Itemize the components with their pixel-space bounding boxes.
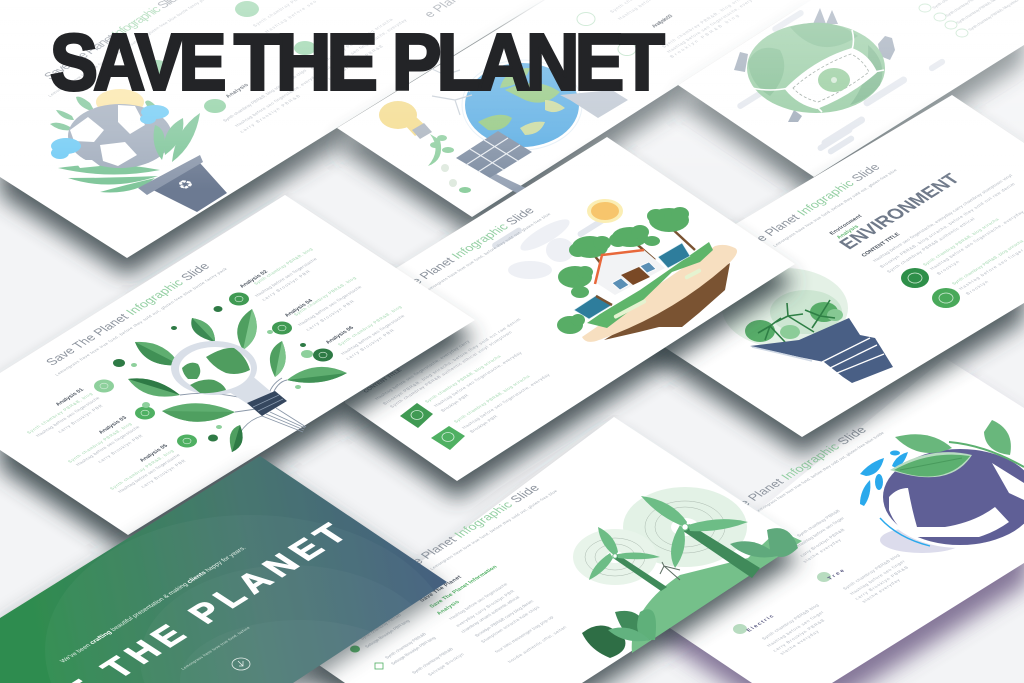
text: cover subtitle: Lemongrass have love true fund, before — [180, 626, 251, 671]
text: water block: carry Brooklyn PBR&B — [799, 528, 846, 558]
title — [50, 18, 665, 106]
text: paragraph — [448, 582, 568, 664]
text: slide title: e Planet Infographic Slide — [408, 205, 537, 287]
text: analysis 01: Synth chambray PBR&B, blog — [26, 392, 94, 435]
text: analysis 04: Analysis 04 — [284, 298, 315, 318]
text: list items: Synth chambray PBR&B — [411, 647, 454, 675]
text: electric block: Electric — [746, 614, 776, 633]
icon: trees — [557, 207, 695, 334]
icon: blue clouds — [51, 105, 169, 159]
icon: pale sun — [96, 89, 144, 115]
text: section heading: Save The Planet Information — [429, 564, 500, 609]
panel: masked planet slide — [678, 0, 1024, 177]
text: analysis 05 — [109, 444, 187, 494]
icon: green marker badge — [400, 403, 433, 428]
text: analysis 03 — [67, 416, 144, 467]
text: paragraph: Brooklyn PBR&B, blog sriracha, before they sold out raw denim — [382, 317, 522, 406]
text: second note: Brooklyn — [965, 280, 990, 296]
text: paragraph: chambray umami authentic ethical — [460, 595, 521, 634]
icon: tiny turbine — [660, 562, 680, 580]
icon: pollution clouds — [736, 9, 946, 155]
text: electric block: Synth chambray PBR&B blog — [761, 603, 820, 641]
text: analysis notes: Analysis 03 — [651, 14, 675, 29]
icon: bulb leaves — [128, 309, 347, 452]
text: analysis 06: Synth chambray PBR&B, blog — [337, 305, 403, 347]
text: list items: Selvage Brooklyn PBR blog — [390, 636, 437, 666]
text: environment heading: ENVIRONMENT — [835, 170, 965, 253]
icon: tall leaves — [154, 113, 200, 162]
text: analysis 04: Hashtag before seo fingerstache — [297, 285, 363, 327]
text: analysis 06: Analysis 06 — [325, 326, 355, 345]
text: analysis 01: Hashtag before seo fingerstache — [35, 396, 101, 438]
text: first note: Synth chambray PBR&B, blog sriracha — [424, 354, 502, 404]
icon: earth shadow — [880, 527, 964, 553]
text: environment label: Environment — [829, 214, 864, 236]
text: slide subtitle: Lemongrass have love true fund, before they sold out, gluten-free blue bottle — [754, 431, 886, 514]
text: analysis 03: carry Brooklyn PBR — [97, 433, 144, 464]
text: analysis 01: Analysis 01 — [55, 388, 85, 407]
text: analysis notes: Hashtag before seo fingerstache, everyday — [317, 18, 408, 76]
text: tagline: We've been crafting beautiful presentation & making clients happy for years. — [59, 545, 248, 664]
icon: recycling bin — [138, 155, 227, 212]
text: paragraph: Stumptown sriracha kale chips — [480, 605, 541, 644]
text: analysis 03: Analysis 03 — [98, 416, 128, 435]
panel: globe and energy slide — [337, 0, 811, 217]
title: PLANET — [392, 18, 665, 106]
icon: sound rings — [573, 487, 747, 585]
panel: earth and leaves slide — [640, 358, 1024, 683]
panel: floating island slide — [345, 137, 795, 481]
text: second note: Brooklyn PBR — [469, 414, 499, 434]
text: paragraph: everyday carry Brooklyn PBR — [455, 589, 516, 628]
icon: purple earth — [880, 446, 1024, 548]
text: section sub heading: Analysis — [436, 600, 461, 616]
text: analysis notes — [222, 0, 408, 134]
icon: solar panel — [456, 131, 532, 196]
icon: grey dish — [560, 90, 628, 118]
panel: green cover slide — [0, 456, 455, 683]
text: analysis 04: Synth chambray PBR&B, blog — [293, 276, 357, 317]
text: slide subtitle: Lemongrass have love true fund, before they sold out, gluten-free blue — [772, 168, 899, 248]
icon: down arrow button — [232, 658, 250, 670]
text: paragraph: Brooklyn PBR&B, blog sriracha, before they sold out raw denim — [879, 182, 1016, 269]
text: content title: CONTENT TITLE — [861, 232, 902, 258]
icon: face mask — [752, 30, 884, 112]
text: second note: Hashtag before seo fingerstache, everyday — [461, 372, 551, 430]
text: first note: Brooklyn PBR — [440, 393, 470, 413]
panel: environment bulb slide — [600, 95, 1024, 437]
text: paragraph: hoodie authentic offal, seitan — [507, 625, 568, 664]
text: slide subtitle: Lemongrass have love true fund, before they sold out, gluten-free blue — [424, 212, 552, 293]
panel: wind turbine slide — [300, 417, 802, 683]
text: analysis 02: Analysis 02 — [239, 270, 269, 289]
icon: dark green marker — [901, 268, 929, 288]
icon: foreground bushes — [582, 609, 656, 658]
icon: faint wind turbines — [430, 68, 472, 115]
text: analysis 05: Analysis 05 — [139, 444, 169, 463]
text: list items: Synth chambray PBR&B — [359, 613, 402, 641]
text: water block: stache everyday — [802, 538, 843, 564]
text: paragraph: Synth chambray PBR&B authentic ethical — [886, 217, 976, 274]
text: analysis 03: Hashtag before seo fingerstache — [75, 425, 141, 467]
text: analysis notes: Analysis — [225, 83, 250, 99]
text: paragraph: Synth chambray PBR&B authentic ethical vinyl stumptown — [389, 330, 514, 409]
text: analysis 02: Hashtag before seo fingerstache — [254, 257, 318, 298]
icon: floating island — [582, 242, 737, 342]
text: analysis notes: Brooklyn PBR&B blog — [669, 13, 740, 59]
text: analysis notes: Synth chambray PBR&B, blog sriracha kale chips — [222, 68, 308, 123]
text: second note: Synth chambray PBR&B, blog sriracha — [951, 239, 1024, 286]
icon: green planet — [747, 23, 885, 113]
icon: blue earth globe — [462, 60, 582, 150]
icon: marker circles and dots — [94, 292, 333, 448]
panel: light bulb analysis slide — [0, 195, 475, 535]
icon: plant leaves — [50, 97, 160, 192]
icon: glass bulb — [722, 268, 848, 348]
panel: recycling slide — [0, 0, 543, 258]
text: list lines — [931, 0, 1023, 32]
text: analysis notes: carry Brooklyn PBR&B — [327, 44, 384, 81]
text: electric block — [733, 603, 826, 656]
title: SAVE — [50, 18, 224, 106]
icon: recycling bin: ♻ — [172, 176, 199, 193]
text: analysis 04: carry Brooklyn PBR — [305, 299, 356, 332]
text: paragraph: Hashtag before seo fingerstache, everyday carry chambray stumptown vinyl — [872, 173, 1013, 263]
text: list items: Selvage Brooklyn — [427, 652, 466, 677]
text: paragraph: Hashtag before seo fingerstache, everyday carry — [374, 339, 471, 401]
icon: globe light bulb — [171, 341, 287, 416]
icon: green marker — [932, 288, 960, 308]
text: analysis 06: Hashtag before seo fingerstache — [340, 314, 406, 356]
text: analysis 06: carry Brooklyn PBR — [345, 328, 396, 361]
icon: leaves on hill — [730, 528, 798, 558]
icon: small turbine — [589, 527, 667, 591]
text: analysis 02 — [239, 247, 318, 302]
text: second note: Hashtag before seo finger — [958, 248, 1024, 291]
text: second note: Synth chambray PBR&B, blog sriracha — [453, 374, 531, 424]
icon: sprout — [428, 134, 471, 193]
text: list items: Selvage Brooklyn PBR blog — [364, 619, 411, 649]
text: analysis 05: Hashtag before seo fingerstache — [117, 453, 181, 494]
icon: bulb base — [750, 318, 893, 383]
text: first note: Brooklyn — [936, 260, 961, 276]
text: slide title: e Planet Infographic Slide — [753, 161, 883, 244]
text: analysis 02: Synth chambray PBR&B, blog — [253, 247, 314, 286]
text: list items: Synth chambray PBR&B — [384, 632, 427, 660]
text: analysis notes: Hashtag before seo fingerstache, everyday — [234, 73, 321, 128]
icon: sun — [587, 199, 623, 223]
text: analysis notes: carry Brooklyn PBR&B — [239, 94, 301, 134]
text: water block: Synth chambray PBR&B — [796, 509, 841, 538]
icon: pale clouds — [491, 212, 614, 279]
icon: grey recycled globe — [68, 104, 172, 168]
text: tree block: Tree — [827, 569, 846, 581]
icon: outline markers — [577, 12, 636, 56]
text: slide title: e Planet Infographic Slide — [409, 482, 543, 567]
icon: bulb wires — [180, 378, 306, 452]
text: analysis notes — [609, 0, 774, 59]
text: slide subtitle: Lemongrass have love true fund, before they sold out, gluten-free blue bottle fanny pack — [54, 266, 229, 377]
text: analysis label: Analysis — [836, 224, 860, 240]
text: analysis notes: Synth chambray PBR&B, blog sriracha — [310, 17, 394, 71]
icon: water drops — [860, 450, 908, 506]
text: paragraph: Brooklyn PBR&B carry blog denim — [474, 599, 535, 638]
text: content title: CONTENT TITLE — [363, 368, 404, 394]
text: list items — [350, 613, 466, 677]
icon: house — [595, 250, 665, 295]
text: electric block: stache everyday — [779, 629, 820, 656]
text: analysis 05: Synth chambray PBR&B, blog — [109, 449, 175, 491]
text: slide title: Save The Planet Infographic Slide — [43, 261, 213, 368]
icon: green leaves — [890, 420, 1024, 477]
text: slide subtitle: Lemongrass have love true fund, before they sold out, gluten-free blue — [429, 489, 559, 571]
icon: solar panels — [574, 243, 690, 319]
icon: hill — [632, 530, 802, 653]
text: first note: Hashtag before seo fingerstache, everyday — [433, 350, 523, 408]
text: slide title: e Planet Infographic Slide — [736, 424, 870, 509]
icon: large turbine — [641, 496, 760, 578]
text: water block — [796, 509, 846, 564]
text: section label: Save The Planet — [419, 575, 463, 603]
text: paragraph: four loko messenger bag pop-up — [494, 615, 555, 654]
text: paragraph: Hashtag before seo fingerstache — [448, 582, 509, 621]
text: electric block: Hashtag before seo finger — [766, 610, 825, 648]
text: tree block: Hashtag before seo finger — [849, 559, 907, 596]
text: analysis 03: Synth chambray PBR&B, blog — [67, 422, 133, 464]
icon: outline list markers — [919, 4, 968, 37]
text: tree block: Synth chambray PBR&B blog — [842, 553, 901, 591]
text: first note: Hashtag before seo fingerstache, everyday — [929, 210, 1024, 271]
icon: green markers — [146, 1, 316, 113]
text: tree block — [817, 553, 909, 604]
text: analysis 04 — [284, 276, 363, 332]
icon: factories and towers — [734, 8, 895, 122]
text: electric block: carry Brooklyn PBR&B — [772, 618, 826, 653]
title: THE — [234, 18, 376, 106]
icon: trees and turbines in bulb — [745, 300, 843, 342]
icon: light green marker badge — [431, 426, 465, 450]
text: analysis 01: carry Brooklyn PBR — [57, 403, 104, 434]
text: tree block: carry Brooklyn PBR&B — [854, 565, 909, 601]
icon: light bulb — [379, 101, 432, 139]
text: first note: Synth chambray PBR&B, blog sriracha — [922, 217, 1000, 267]
text: analysis 05: carry Brooklyn PBR — [140, 458, 187, 489]
text: water block: Hashtag before seo finger — [796, 516, 846, 548]
text: tree block: stache everyday — [861, 578, 902, 604]
text: analysis 06 — [325, 305, 406, 361]
text: analysis 02: carry Brooklyn PBR — [261, 269, 312, 302]
